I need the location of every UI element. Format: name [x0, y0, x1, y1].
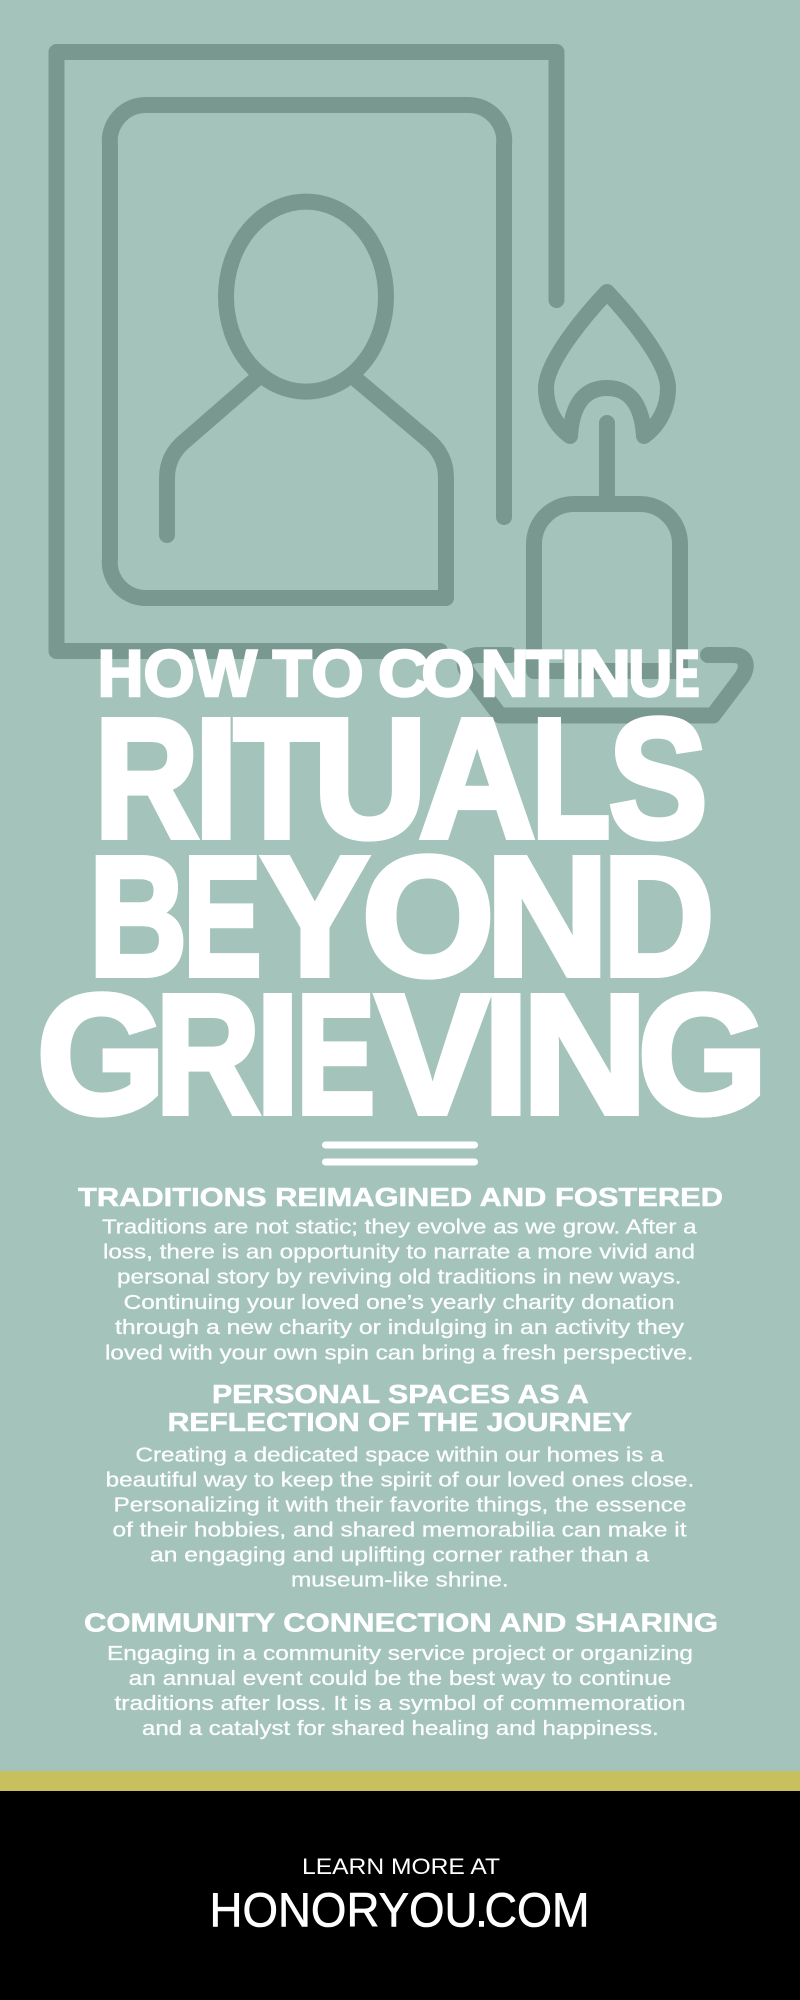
icon: memorial portrait frame with candle — [56, 52, 746, 716]
footer label: LEARN MORE AT — [302, 1854, 500, 1879]
body text: personal spaces: of their hobbies, and shared memorabilia can make it — [112, 1519, 687, 1542]
title line: how to continue: T — [273, 636, 312, 710]
body text: traditions reimagined: loved with your own spin can bring a fresh perspective. — [105, 1342, 694, 1365]
heading: personal spaces: REFLECTION OF THE JOURNEY — [168, 1407, 632, 1437]
body text: personal spaces: an engaging and uplifting corner rather than a — [150, 1544, 650, 1567]
body text: personal spaces: museum-like shrine. — [291, 1569, 509, 1592]
section: personal spaces — [106, 1379, 694, 1592]
body text: personal spaces: Creating a dedicated space within our homes is a — [136, 1444, 664, 1467]
title line: grieving: V — [376, 960, 489, 1150]
title line: beyond: E — [183, 822, 262, 1012]
body text: traditions reimagined — [102, 1215, 697, 1365]
title line: rituals: L — [532, 684, 610, 874]
body text: community connection — [107, 1642, 693, 1740]
title line: rituals: T — [234, 684, 320, 874]
title line: how to continue: C — [378, 636, 428, 710]
title line: rituals: I — [194, 684, 238, 874]
heading: community connection: COMMUNITY CONNECTION AND SHARING — [84, 1608, 718, 1638]
title line: beyond: B — [89, 822, 187, 1012]
body text: traditions reimagined: personal story by reviving old traditions in new ways. — [117, 1266, 682, 1289]
body text: traditions reimagined: Traditions are not static; they evolve as we grow. After a — [102, 1215, 697, 1238]
footer url: COM — [484, 1885, 590, 1938]
icon: wick — [599, 423, 615, 504]
title line: how to continue: N — [578, 636, 631, 710]
title line: how to continue: O — [421, 636, 475, 710]
divider lines — [322, 1142, 478, 1166]
body text: personal spaces — [106, 1444, 694, 1592]
title line: grieving: G — [638, 960, 768, 1150]
footer — [0, 1791, 800, 2000]
footer background — [0, 1791, 800, 2000]
body text: traditions reimagined: Continuing your loved one’s yearly charity donation — [124, 1291, 675, 1314]
title line: how to continue: T — [526, 636, 562, 710]
title line: beyond: O — [362, 822, 494, 1012]
title line: grieving: E — [296, 960, 375, 1150]
title — [37, 636, 767, 1150]
gold band — [0, 1771, 800, 1791]
section: traditions reimagined — [78, 1182, 723, 1365]
section: community connection — [84, 1608, 718, 1740]
title line: how to continue: O — [311, 636, 364, 710]
body text: personal spaces: beautiful way to keep the spirit of our loved ones close. — [106, 1469, 694, 1492]
title line: how to continue: O — [144, 636, 195, 710]
icon: candle body — [534, 504, 680, 671]
title line: how to continue: U — [628, 636, 672, 710]
title line: rituals: U — [313, 684, 427, 874]
icon: outer frame — [56, 52, 556, 651]
icon: person head — [226, 202, 386, 392]
title line: how to continue: E — [674, 636, 700, 710]
body text: traditions reimagined: loss, there is an opportunity to narrate a more vivid and — [103, 1241, 695, 1264]
heading: personal spaces — [168, 1379, 632, 1437]
body text: personal spaces: Personalizing it with their favorite things, the essence — [114, 1493, 686, 1516]
title line: beyond: D — [603, 822, 714, 1012]
title line: grieving: G — [37, 960, 165, 1150]
title line: rituals: A — [419, 684, 536, 874]
body text: traditions reimagined: through a new charity or indulging in an activity they — [115, 1316, 685, 1339]
footer url: . — [475, 1885, 488, 1938]
title line: how to continue: H — [98, 636, 143, 710]
title line: grieving: R — [155, 960, 260, 1150]
body text: community connection: an annual event could be the best way to continue — [129, 1667, 671, 1690]
title line: beyond: Y — [261, 822, 369, 1012]
icon: flame — [546, 292, 668, 436]
icon: inner portrait frame — [110, 105, 504, 598]
title line: rituals: S — [609, 684, 708, 874]
title line: how to continue: W — [194, 636, 258, 710]
icon: person left shoulder — [167, 380, 255, 535]
title line: rituals: R — [94, 684, 199, 874]
title line: grieving: I — [483, 960, 528, 1150]
title line: how to continue: I — [561, 636, 582, 710]
icon: candle tray — [465, 655, 746, 716]
body text: community connection: Engaging in a community service project or organizing — [107, 1642, 693, 1665]
body text: community connection: and a catalyst for shared healing and happiness. — [142, 1717, 659, 1740]
heading: traditions reimagined: TRADITIONS REIMAGINED AND FOSTERED — [78, 1182, 723, 1212]
title line: grieving: I — [256, 960, 300, 1150]
heading: personal spaces: PERSONAL SPACES AS A — [212, 1379, 589, 1409]
title line: grieving: N — [522, 960, 648, 1150]
footer url: HONORYOU — [210, 1885, 478, 1938]
body text: community connection: traditions after loss. It is a symbol of commemoration — [114, 1692, 686, 1715]
title line: how to continue: N — [480, 636, 529, 710]
title line: beyond: N — [486, 822, 609, 1012]
